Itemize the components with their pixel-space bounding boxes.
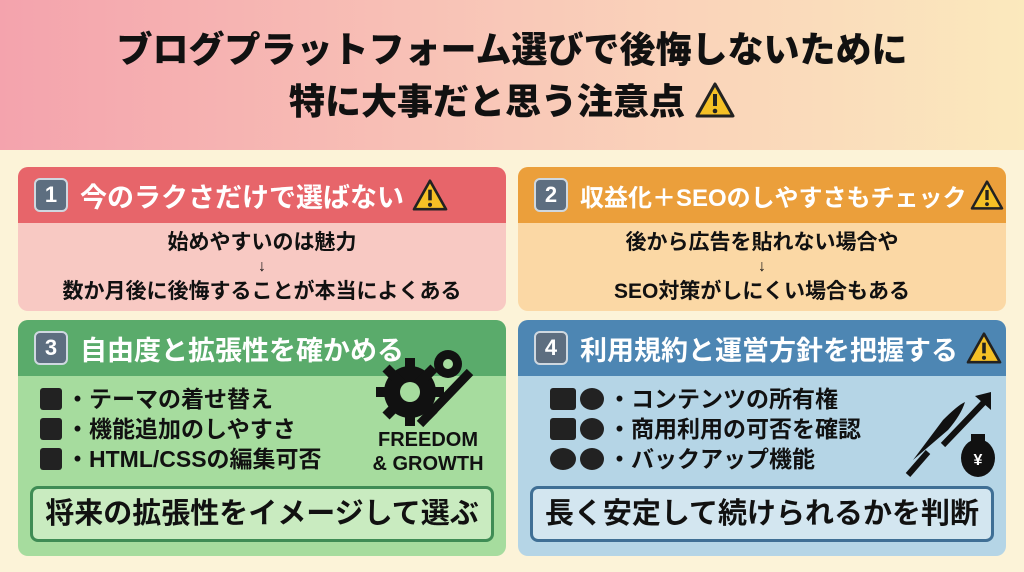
callout 4 [530, 486, 994, 542]
header 3: 自由度と拡張性を確かめる [80, 336, 404, 366]
header 1 [18, 167, 506, 223]
panel: 4 [518, 320, 1006, 556]
header 1: 今のラクさだけで選ばない [80, 182, 404, 212]
panel: 1 [18, 167, 506, 311]
header 4 [518, 320, 1006, 376]
header 4: 4 [545, 335, 557, 360]
list 3: ・HTML/CSSの編集可否 [66, 446, 322, 472]
text 2: ↓ [758, 258, 766, 275]
title: 特に大事だと思う注意点 [289, 81, 685, 122]
label: freedom [372, 429, 484, 475]
list 4: ・商用利用の可否を確認 [608, 416, 861, 442]
title [0, 0, 1024, 150]
label: freedom: & GROWTH [372, 453, 484, 475]
list 4 [550, 386, 861, 472]
text 1: 始めやすいのは魅力 数か月後に後悔することが本当によくある [62, 231, 462, 303]
icon: rocket money: ¥ [974, 452, 983, 469]
icon: rocket money [906, 392, 995, 477]
panel: 3 [18, 320, 506, 556]
header 3: 3 [45, 335, 57, 360]
list 4: ・バックアップ機能 [608, 446, 815, 472]
header 3 [18, 320, 506, 376]
list 3: ・機能追加のしやすさ [66, 416, 296, 442]
list 3 [40, 386, 322, 472]
header 4: 利用規約と運営方針を把握する [580, 336, 958, 366]
panel: 2 [518, 167, 1006, 311]
list 4: ・コンテンツの所有権 [608, 386, 838, 412]
callout 4: 長く安定して続けられるかを判断 [545, 498, 979, 530]
title: ブログプラットフォーム選びで後悔しないために [117, 29, 907, 70]
label: freedom: FREEDOM [378, 429, 478, 451]
text 1: ↓ [258, 258, 266, 275]
callout 3 [30, 486, 494, 542]
text 2: 後から広告を貼れない場合や SEO対策がしにくい場合もある [614, 231, 910, 303]
header 1: 1 [45, 182, 57, 207]
callout 3: 将来の拡張性をイメージして選ぶ [45, 498, 479, 530]
header 2: 2 [545, 182, 557, 207]
header 2 [518, 167, 1006, 223]
icon: gear wrench [376, 350, 474, 428]
header 2: 収益化＋SEOのしやすさもチェック [580, 184, 966, 212]
list 3: ・テーマの着せ替え [66, 386, 273, 412]
